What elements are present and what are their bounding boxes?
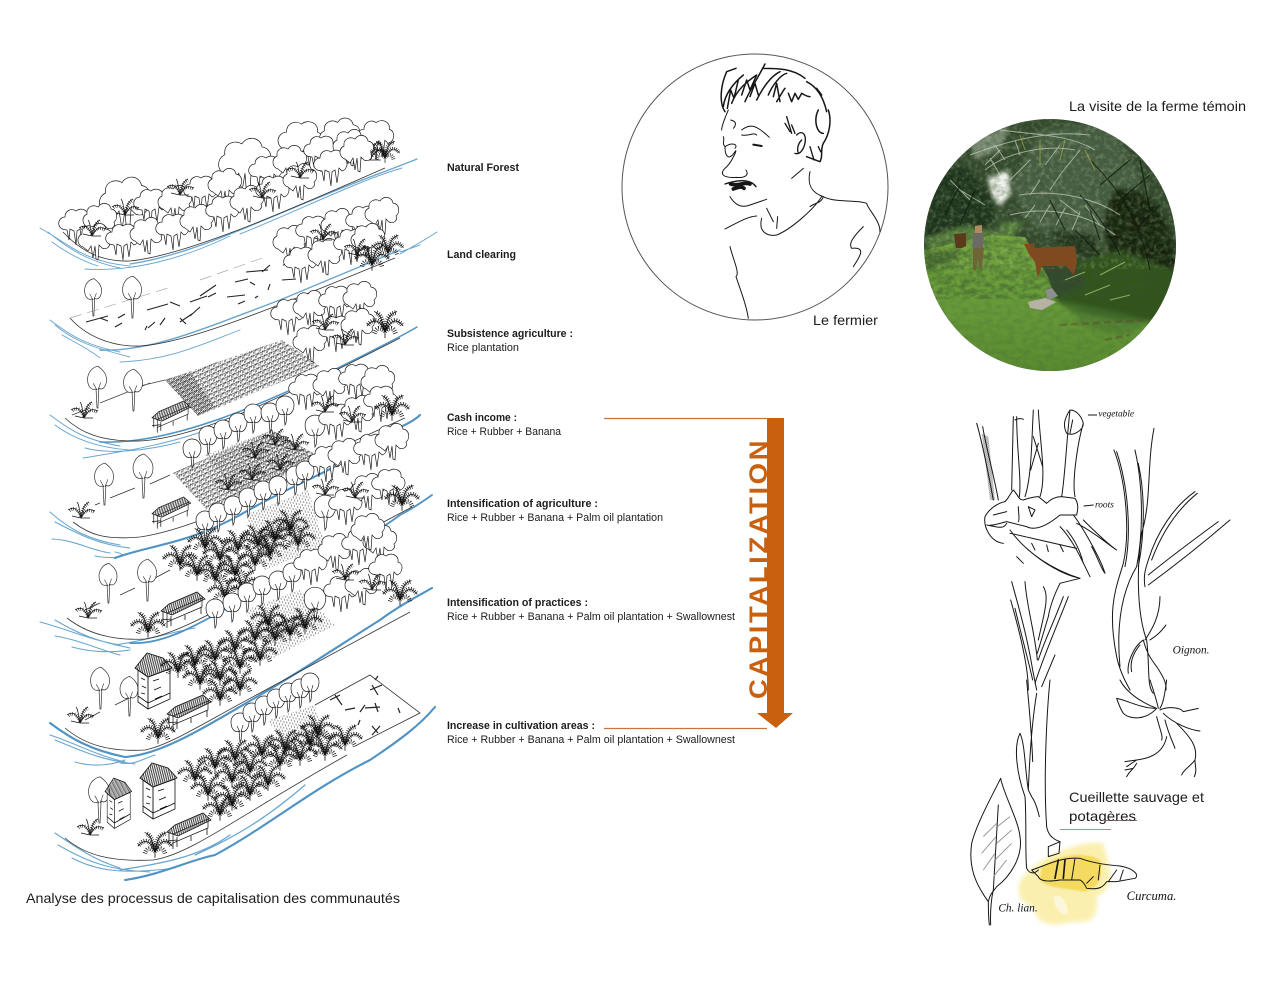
strip 5: palm oil intensification [40,423,432,655]
label: intensification of agriculture: Rice + Rubber + Banana + Palm oil plantation [447,512,663,524]
stage labels [447,162,735,746]
strip 2: land clearing [50,197,437,362]
label: subsistence agriculture: Subsistence agriculture : [447,328,573,340]
illustration: stages of land use, seven strips [40,118,437,880]
botanical sketch: rhizome and shoots [977,410,1230,693]
label: land clearing: Land clearing [447,249,516,261]
label: subsistence agriculture [447,328,573,354]
label: subsistence agriculture: Rice plantation [447,342,519,354]
strip 6: swallow nest and palm plantation [50,513,432,765]
arrow: capitalization: CAPITALIZATION [744,440,773,699]
label: increase in cultivation areas: Rice + Rubber + Banana + Palm oil plantation + Swallownest [447,734,735,746]
photo: farm visit with palms and cows [920,115,1180,375]
arrow: capitalization [604,418,793,728]
botanical sketch: rhizome and shoots: roots [1095,500,1114,510]
label: intensification of agriculture: Intensification of agriculture : [447,498,598,510]
caption: analysis of capitalization: Analyse des processus de capitalisation des communautés [26,890,400,906]
strip 4: rice, rubber, banana [50,364,420,558]
botanical sketch: rhizome and shoots: Oignon. [1173,644,1209,656]
caption: le fermier: Le fermier [813,312,878,328]
portrait: the farmer [622,54,888,320]
label: intensification of practices: Intensification of practices : [447,597,588,609]
label: intensification of practices [447,597,735,623]
botanical sketch: turmeric root and leaf [971,680,1200,925]
yellow watercolour wash [1018,843,1110,924]
caption: farm visit: La visite de la ferme témoin [1069,98,1246,114]
botanical sketch: turmeric root and leaf: Curcuma. [1127,889,1176,903]
label: intensification of agriculture [447,498,663,524]
caption: wild harvest and vegetable gardens: potagères [1069,808,1136,824]
strip 1: natural forest [40,118,417,269]
strip 3: rice plantation [50,281,417,458]
label: cash income [447,412,562,438]
caption: wild harvest and vegetable gardens: Cueillette sauvage et [1069,789,1204,805]
caption: wild harvest and vegetable gardens [1060,789,1204,830]
botanical sketch: rhizome and shoots: vegetable [1098,410,1134,420]
label: cash income: Cash income : [447,412,517,424]
label: increase in cultivation areas [447,720,735,746]
strip 7: increase in cultivation areas [55,673,435,880]
label: natural forest: Natural Forest [447,162,519,174]
label: cash income: Rice + Rubber + Banana [447,426,562,438]
botanical sketch: turmeric root and leaf: Ch. lian. [998,903,1038,915]
label: intensification of practices: Rice + Rubber + Banana + Palm oil plantation + Swallownest [447,611,735,623]
label: increase in cultivation areas: Increase in cultivation areas : [447,720,595,732]
